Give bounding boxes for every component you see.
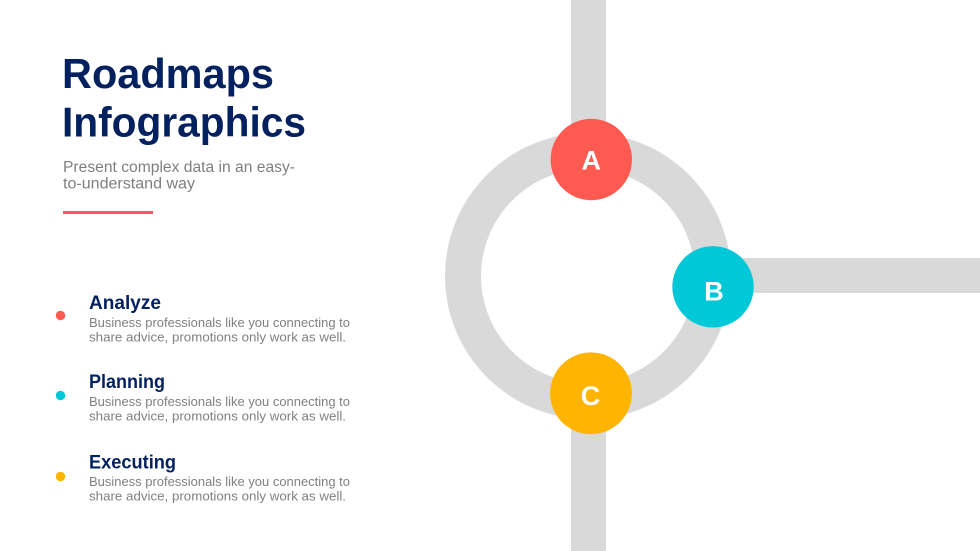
description: Planning [89, 394, 350, 424]
node C: C [581, 381, 600, 411]
accent underline [63, 211, 153, 214]
node C [550, 352, 632, 434]
title: Infographics [62, 98, 306, 146]
bullet: red [56, 311, 65, 320]
road: top vertical [571, 0, 606, 135]
description: Executing [89, 474, 350, 504]
title [62, 50, 306, 146]
title: Roadmaps [62, 50, 274, 97]
bullet: amber [56, 472, 65, 481]
road: right horizontal [725, 258, 980, 293]
node A [551, 119, 632, 200]
subtitle: to-understand way [63, 176, 195, 192]
bullet: teal [56, 391, 65, 400]
road: ring [463, 151, 713, 401]
description: Analyze: Business professionals like you connecting to [89, 315, 350, 330]
description: Executing: Business professionals like you connecting to [89, 474, 350, 489]
roadmap diagram [463, 0, 980, 551]
heading: Analyze: Analyze [89, 293, 161, 314]
node A: A [582, 146, 601, 176]
description: Planning: share advice, promotions only work as well. [89, 408, 346, 424]
description: Analyze [89, 315, 350, 344]
subtitle [63, 159, 295, 192]
description: Executing: share advice, promotions only work as well. [89, 488, 346, 504]
node B [672, 246, 754, 328]
list item: Executing [56, 452, 350, 504]
subtitle: Present complex data in an easy- [63, 159, 295, 176]
list item: Planning [56, 372, 350, 424]
heading: Planning: Planning [89, 372, 165, 393]
list item: Analyze [56, 293, 350, 344]
description: Planning: Business professionals like you connecting to [89, 394, 350, 409]
node B: B [704, 276, 724, 306]
description: Analyze: share advice, promotions only work as well. [89, 330, 346, 344]
road: bottom vertical [571, 415, 606, 551]
heading: Executing: Executing [89, 452, 176, 474]
